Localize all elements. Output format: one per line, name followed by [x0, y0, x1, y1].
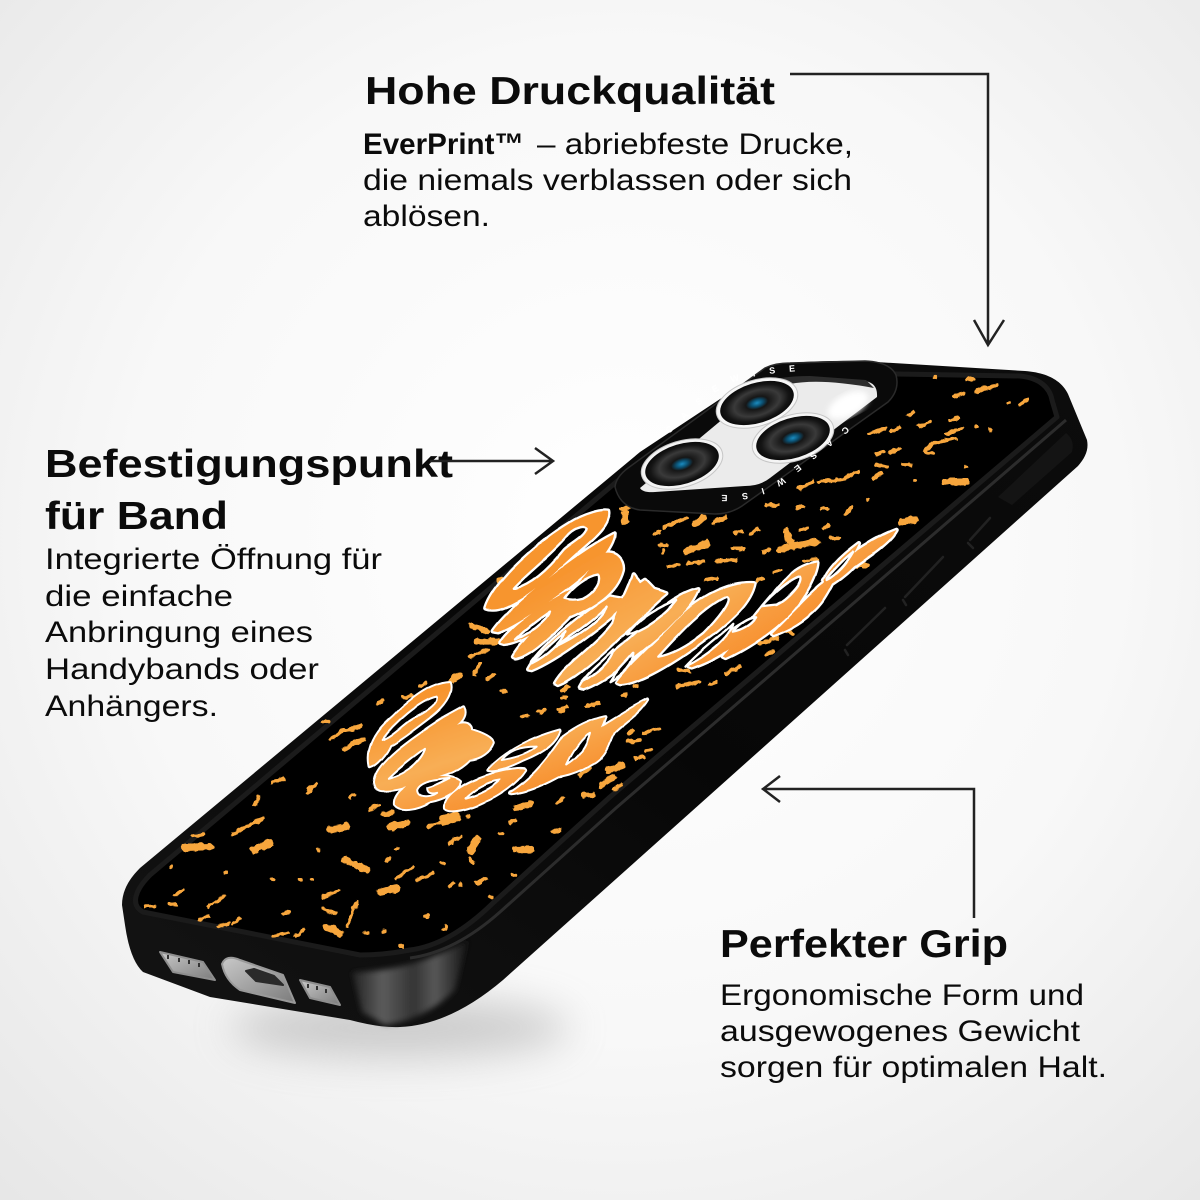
text block — [720, 979, 1107, 1084]
lettering white outline — [486, 511, 896, 689]
heading — [45, 443, 453, 538]
camera window — [640, 378, 877, 492]
arrow: print quality — [790, 74, 1004, 345]
text block: Anhängers. — [45, 690, 218, 723]
window top shadow — [740, 376, 874, 402]
speckle pattern: around main lettering — [470, 560, 867, 707]
speckle pattern: lower area — [145, 678, 593, 947]
text block: – abriebfeste Drucke, — [537, 128, 853, 161]
text block: ausgewogenes Gewicht — [720, 1015, 1081, 1048]
arrow: grip — [763, 776, 974, 918]
heading: Hohe Druckqualität — [365, 70, 775, 113]
text block: ablösen. — [363, 200, 490, 233]
camera bump ring — [615, 361, 897, 514]
heading: für Band — [45, 495, 228, 538]
button: camera control — [998, 433, 1073, 505]
heading: Perfekter Grip — [720, 923, 1008, 966]
second word white outline — [369, 683, 648, 810]
text block: sorgen für optimalen Halt. — [720, 1051, 1107, 1084]
speckle pattern: middle area — [350, 672, 658, 818]
rim highlight — [410, 420, 1066, 958]
lens: top — [710, 369, 804, 437]
callout: Perfekter Grip — [720, 923, 1107, 1084]
text block: die einfache — [45, 580, 233, 613]
side buttons — [845, 518, 990, 655]
lens: lower left — [635, 430, 729, 498]
phone case — [122, 361, 1088, 1027]
text block: Ergonomische Form und — [720, 979, 1084, 1012]
case back face — [136, 372, 1057, 955]
phone shadow — [230, 998, 570, 1058]
text block: Handybands oder — [45, 653, 319, 686]
speckle pattern: upper area — [620, 378, 1027, 580]
lettering counters — [513, 527, 853, 682]
text block — [45, 543, 382, 723]
text block: EverPrint™ — [363, 128, 524, 161]
charging port — [222, 958, 295, 1003]
lens: right — [746, 404, 840, 472]
second word fill — [369, 683, 648, 810]
bottom speaker left — [160, 952, 215, 980]
bump brand text top: CASEWISE — [669, 365, 795, 433]
text block — [363, 128, 853, 233]
case body side — [122, 361, 1088, 1027]
text block: die niemals verblassen oder sich — [363, 164, 852, 197]
callout: Befestigungspunkt — [45, 443, 453, 723]
camera module — [614, 360, 898, 515]
second word counters — [382, 697, 590, 798]
artwork lettering: second word — [369, 683, 648, 810]
corner highlight — [352, 940, 468, 1025]
artwork lettering: main word — [486, 511, 896, 689]
heading: Befestigungspunkt — [45, 443, 453, 486]
flash — [823, 385, 873, 425]
bottom speaker right — [300, 980, 340, 1005]
text block: Integrierte Öffnung für — [45, 543, 382, 576]
lettering fill — [486, 511, 896, 689]
text block: Anbringung eines — [45, 616, 313, 649]
callout: Hohe Druckqualität — [363, 70, 853, 233]
bump brand text bottom: CASEWISE — [722, 427, 848, 502]
arrow: strap attachment — [430, 448, 553, 474]
